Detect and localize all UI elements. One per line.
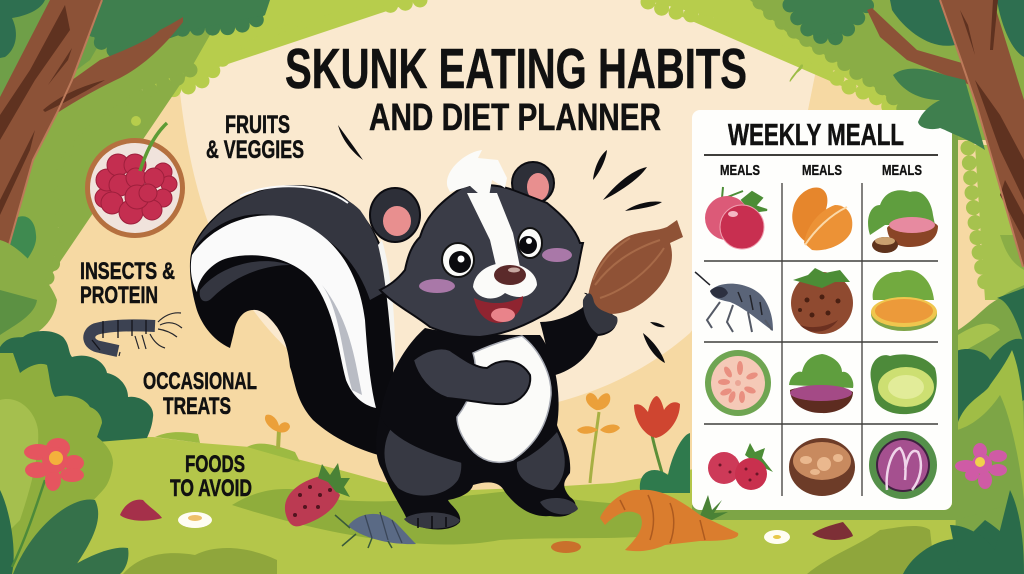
top-right foliage — [645, 0, 1024, 300]
left tree — [0, 0, 183, 277]
meal: red cabbage — [869, 431, 937, 499]
label: occasional treats — [143, 368, 257, 420]
column headings: MEALS — [882, 162, 922, 179]
column headings: MEALS — [720, 162, 760, 179]
flowers: centre right — [577, 393, 690, 493]
title: AND DIET PLANNER — [369, 97, 661, 139]
beetle on ground — [335, 512, 416, 548]
arm holding nut — [540, 293, 617, 376]
meal: tomatoes — [705, 187, 767, 249]
flower: left red — [12, 438, 84, 567]
card shadow — [692, 115, 958, 520]
label: foods to avoid: TO AVOID — [170, 475, 252, 502]
planner heading: WEEKLY MEALL — [728, 117, 904, 152]
meal: nut stew bowl — [789, 438, 855, 496]
meal: guava slice on leaves — [705, 350, 771, 416]
column headings: MEALS — [802, 162, 842, 179]
label: insects and protein — [80, 258, 175, 309]
face details — [419, 228, 572, 323]
label: occasional treats: OCCASIONAL — [143, 368, 257, 395]
face stripe — [467, 193, 520, 270]
label: foods to avoid: FOODS — [185, 451, 245, 478]
meal planner card — [692, 110, 952, 510]
belly — [457, 336, 551, 462]
column headings — [720, 162, 922, 179]
grass ground — [0, 432, 960, 574]
carrots on ground — [600, 490, 738, 551]
meal: berries pair — [708, 443, 773, 490]
ears — [370, 162, 554, 242]
head — [380, 185, 583, 337]
meal: melon with leaves — [871, 270, 937, 331]
nut held by skunk — [583, 220, 683, 334]
title — [285, 37, 747, 139]
meal: beetle — [695, 272, 773, 332]
meal: salad and bowls — [868, 190, 938, 253]
left bushes — [0, 240, 153, 574]
label: fruits and veggies — [206, 111, 304, 164]
arm on belly — [413, 348, 530, 404]
motion marks — [338, 125, 665, 363]
meal: fruit with leaves — [791, 268, 853, 334]
small ground items — [120, 500, 853, 553]
flower: right pink — [955, 443, 1007, 489]
planner grid — [704, 155, 938, 496]
label: fruits and veggies: & VEGGIES — [206, 136, 304, 164]
sprout: left orange — [265, 415, 290, 449]
label: insects and protein: PROTEIN — [80, 282, 158, 309]
label: insects and protein: INSECTS & — [80, 258, 175, 285]
meal: cabbage slice — [871, 354, 937, 414]
right bushes — [903, 285, 1024, 574]
meal: orange halves — [792, 187, 852, 250]
title: SKUNK EATING HABITS — [285, 37, 747, 101]
icon: larva insect — [89, 313, 182, 356]
top-left foliage — [0, 0, 420, 345]
icon: berries in bowl — [85, 116, 185, 238]
legs — [376, 405, 578, 529]
meal: leafy bowl beet — [789, 354, 853, 413]
strawberry on ground — [285, 463, 350, 526]
hair tuft — [447, 150, 507, 202]
label: occasional treats: TREATS — [163, 393, 231, 420]
body — [380, 328, 559, 466]
foliage overlapping card corner — [893, 69, 985, 150]
skunk mascot — [190, 150, 617, 529]
right tree — [867, 0, 1024, 267]
label: foods to avoid — [170, 451, 252, 502]
tail — [190, 185, 395, 457]
label: fruits and veggies: FRUITS — [225, 111, 290, 139]
